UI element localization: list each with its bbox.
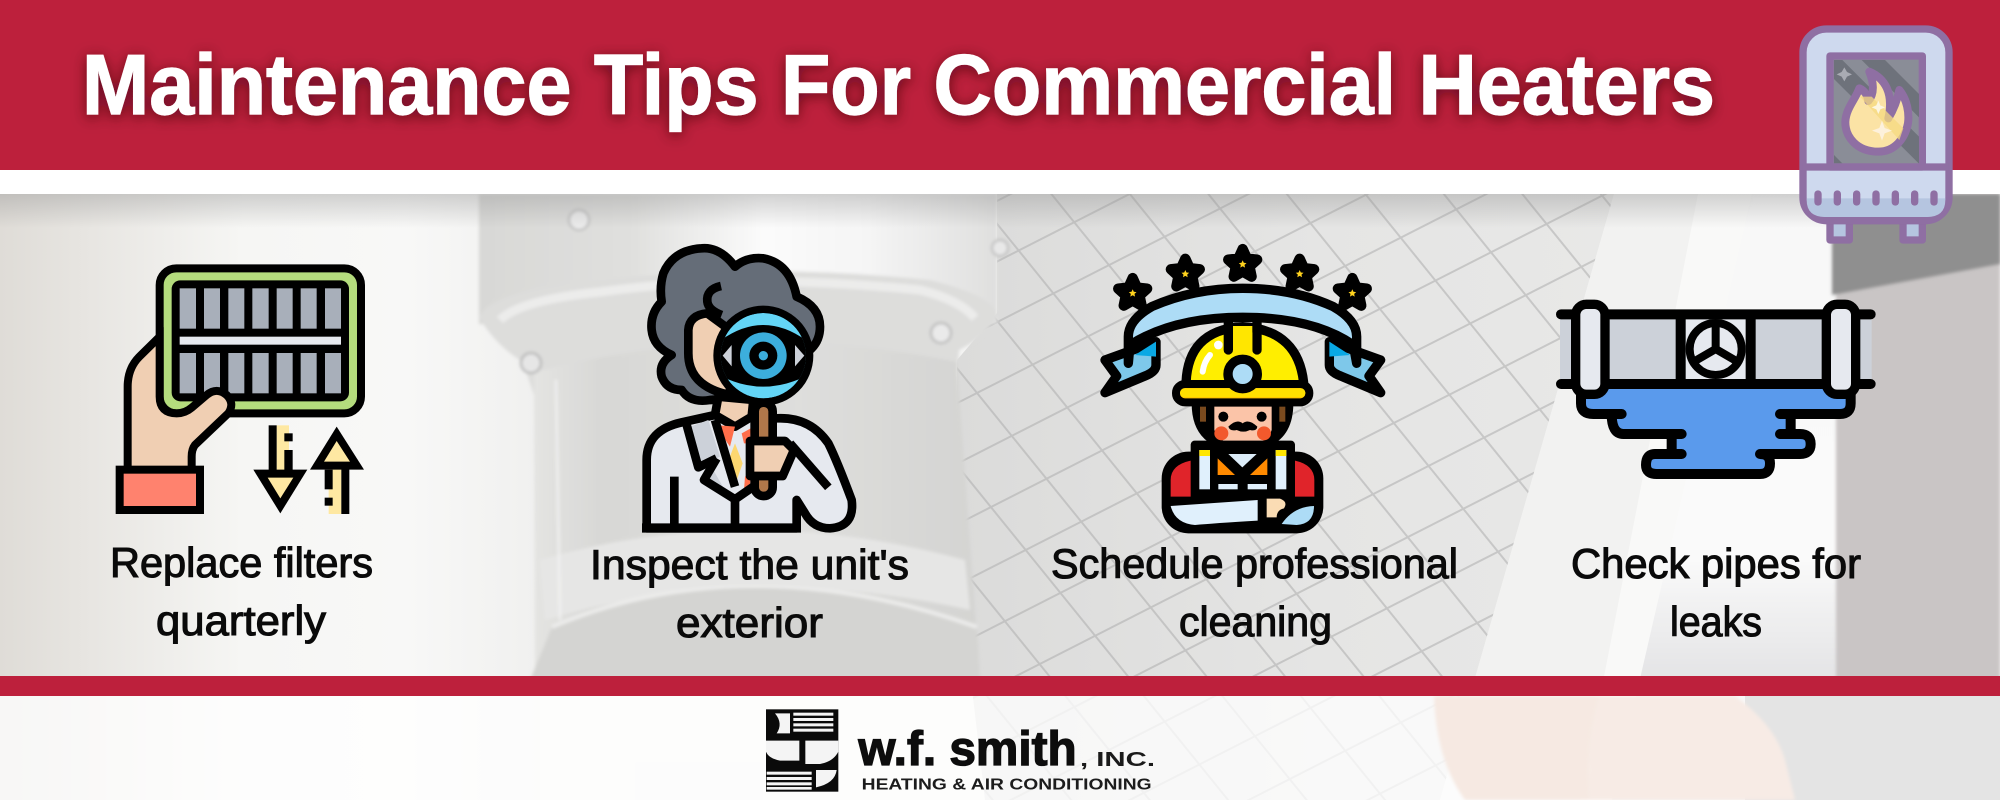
icon: hand holding air filter with arrows — [120, 268, 364, 514]
label: inspect exterior: Inspect the unit's — [590, 541, 909, 588]
label: inspect exterior: exterior — [676, 599, 823, 646]
logo wordmark: w.f. smith — [857, 722, 1077, 776]
label: check pipes: leaks — [1670, 598, 1762, 645]
label: replace filters: quarterly — [156, 597, 326, 644]
flame — [1845, 72, 1908, 152]
hair — [651, 248, 820, 401]
pipe edges — [1561, 314, 1871, 384]
filter frame — [160, 268, 361, 413]
heater base shade — [1807, 198, 1945, 217]
icon: inspector with magnifying glass — [642, 248, 852, 528]
hair curl — [707, 286, 722, 315]
filter grille — [172, 280, 349, 401]
top red banner — [0, 0, 2000, 170]
bottom right grey wall — [1745, 696, 2000, 800]
magnifier lens and eye — [710, 306, 817, 406]
sleeve fold — [790, 443, 828, 487]
head and hair — [1192, 403, 1293, 452]
label: check pipes: Check pipes for — [1571, 540, 1861, 587]
neck — [715, 397, 753, 427]
water puddle — [1581, 388, 1851, 474]
torso — [1162, 441, 1323, 533]
company logo — [766, 709, 1155, 793]
label: schedule cleaning — [1051, 540, 1458, 645]
shirt collar and tie — [691, 420, 751, 493]
icon: leaking pipe with water puddle — [1560, 304, 1872, 474]
title: Maintenance Tips For Commercial Heaters — [82, 38, 1715, 133]
icon: heater with flame — [1803, 29, 1949, 240]
heater divider — [1803, 156, 1949, 178]
logo suffix: , INC. — [1080, 749, 1155, 771]
red divider band — [0, 676, 2000, 696]
heater legs — [1830, 218, 1922, 240]
logo mark — [766, 709, 838, 792]
ribbon arch — [1128, 288, 1357, 363]
heater vents — [1818, 194, 1934, 202]
lab coat — [647, 415, 852, 528]
hard hat — [1176, 322, 1309, 402]
label: check pipes — [1571, 540, 1861, 645]
label: inspect exterior — [590, 541, 909, 646]
label: schedule cleaning: cleaning — [1179, 598, 1332, 645]
valve wheel — [1690, 323, 1742, 375]
magnifier handle — [755, 403, 773, 496]
coat seams — [642, 420, 801, 528]
star centres — [1129, 260, 1356, 297]
sleeve cuff — [120, 470, 200, 510]
heater window — [1830, 56, 1922, 167]
arrow up — [310, 427, 364, 514]
pipe flanges — [1576, 304, 1856, 394]
pipe centre section — [1686, 319, 1746, 379]
logo tagline: HEATING & AIR CONDITIONING — [862, 776, 1152, 793]
face — [688, 313, 730, 395]
white strip below banner — [0, 170, 2000, 194]
arrow down — [253, 425, 307, 513]
heater body — [1803, 29, 1949, 221]
pipe body — [1560, 319, 1872, 379]
background photo: duct, mesh filter and hand — [0, 194, 2000, 800]
icon: professional cleaner with five stars — [1105, 249, 1381, 533]
hand — [128, 337, 231, 472]
label: schedule cleaning: Schedule professional — [1051, 540, 1458, 587]
face — [1214, 407, 1272, 446]
ribbon tails — [1105, 342, 1381, 393]
crossed arms — [1171, 499, 1314, 525]
faded hand in photo — [1434, 696, 1795, 800]
bottom light overlay — [0, 696, 2000, 800]
five stars — [1118, 249, 1367, 306]
label: replace filters: Replace filters — [110, 539, 373, 586]
hand gripping handle — [750, 441, 794, 476]
label: replace filters — [110, 539, 373, 644]
